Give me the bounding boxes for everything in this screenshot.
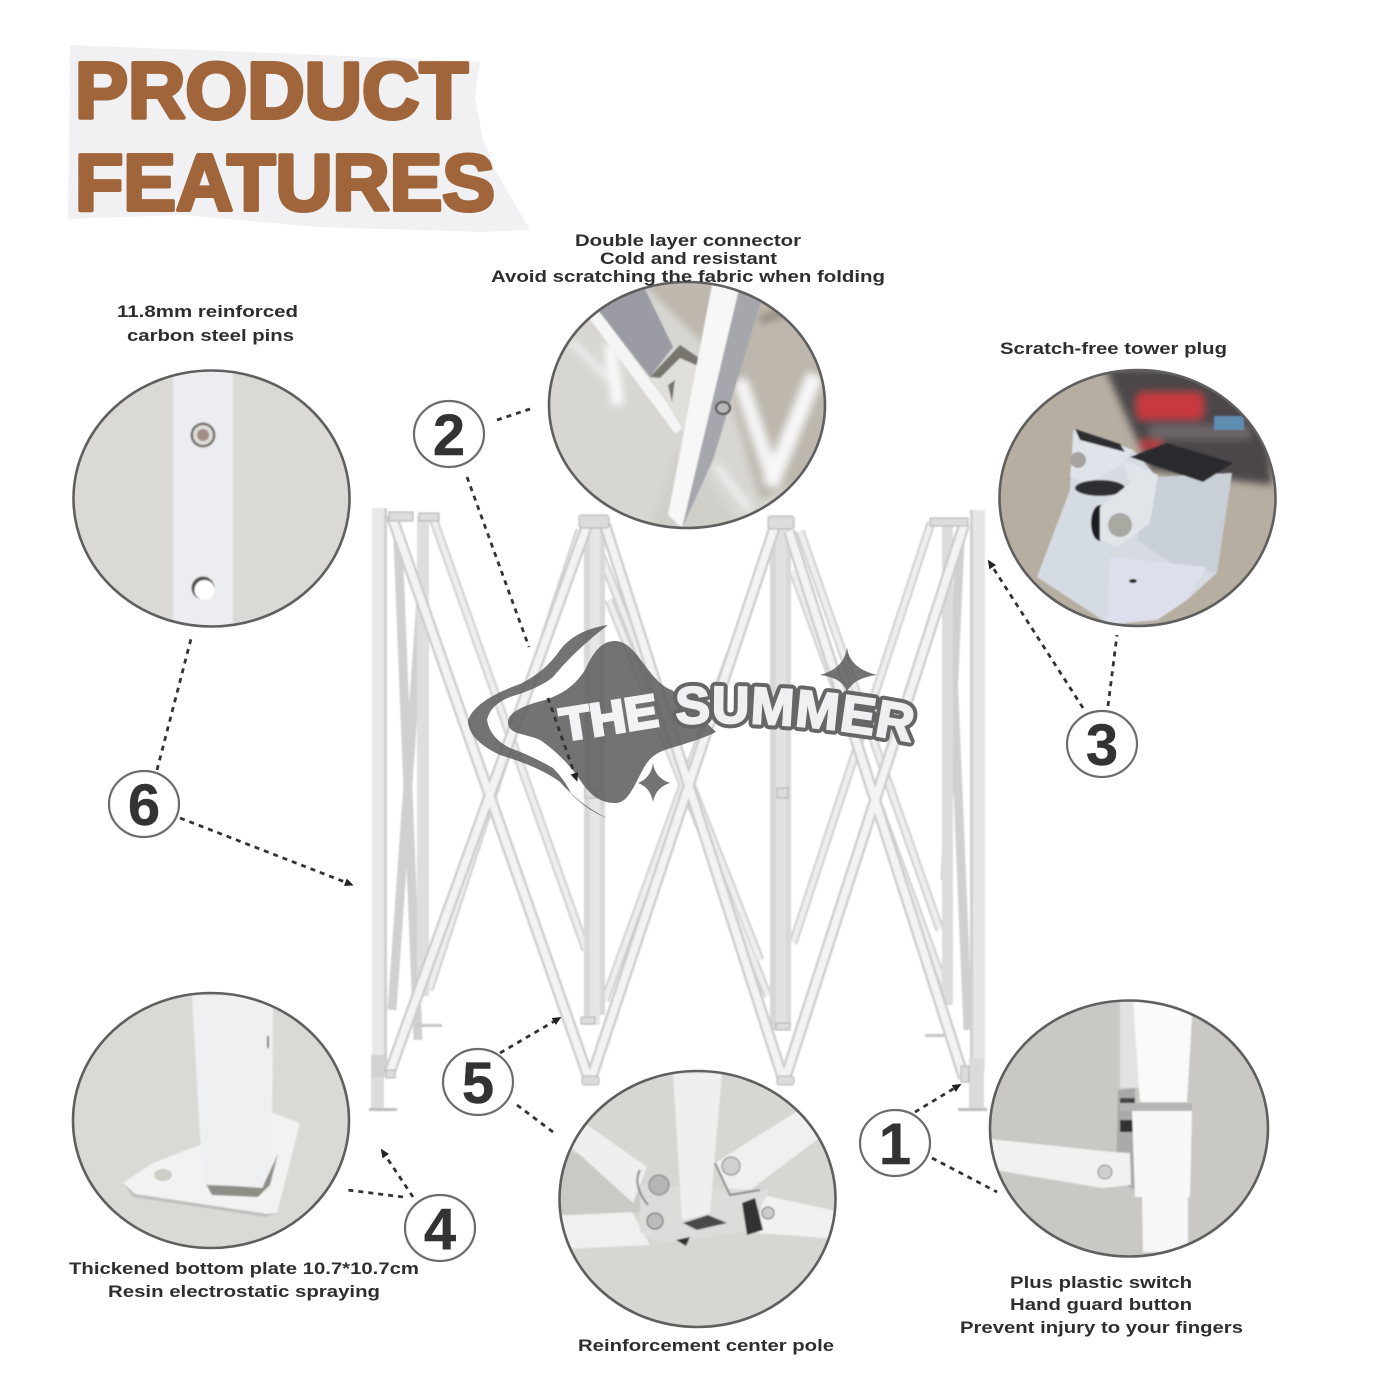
- label: bottom plate: Thickened bottom plate 10.7*10.7cm: [69, 1259, 419, 1278]
- number badge 4: 4: [424, 1197, 456, 1262]
- panel: 5 reinforcement center pole: [555, 1068, 840, 1330]
- panel: 3 scratch-free tower plug: [995, 365, 1280, 630]
- label: plastic switch: Prevent injury to your fingers: [960, 1318, 1243, 1337]
- title: FEATURES: [75, 138, 495, 227]
- title: [68, 45, 530, 232]
- label: bottom plate: [69, 1259, 419, 1301]
- label: bottom plate: Resin electrostatic spraying: [108, 1282, 380, 1301]
- number badge 6: [109, 771, 179, 838]
- number badge 6: 6: [128, 773, 160, 838]
- number badge 3: [1067, 711, 1137, 778]
- panel: 2 double layer connector: [545, 280, 830, 530]
- number badge 5: 5: [462, 1051, 494, 1116]
- label: carbon steel pins: 11.8mm reinforced: [117, 302, 298, 321]
- label: double layer connector: [491, 231, 885, 286]
- logo shapes: [468, 625, 877, 818]
- front scissor struts: [389, 514, 964, 1082]
- label: center pole: Reinforcement center pole: [578, 1336, 834, 1355]
- label: carbon steel pins: [117, 302, 298, 345]
- label: double layer connector: Double layer connector: [575, 231, 801, 250]
- panel: 4 thickened bottom plate: [70, 990, 355, 1252]
- label: tower plug: Scratch-free tower plug: [1000, 339, 1227, 358]
- callout arrows: [157, 409, 1117, 1197]
- panel: 1 plastic switch: [980, 996, 1272, 1261]
- label: plastic switch: Hand guard button: [1010, 1295, 1192, 1314]
- label: carbon steel pins: carbon steel pins: [127, 326, 294, 345]
- watermark logo: THE SUMMER: [468, 625, 918, 818]
- panel: 6 carbon steel pins: [70, 365, 355, 630]
- rear struts: [392, 518, 968, 1040]
- number badge 1: 1: [879, 1112, 911, 1177]
- logo wordmark: THE: [556, 684, 661, 751]
- number badge 3: 3: [1086, 713, 1118, 778]
- watermark logo: THE SUMMER: SUMMER: [676, 686, 914, 743]
- label: plastic switch: Plus plastic switch: [1010, 1273, 1192, 1292]
- title: PRODUCT: [75, 46, 468, 135]
- joints: [386, 512, 969, 1085]
- watermark logo: THE SUMMER: SUMMER: [672, 682, 918, 747]
- label: double layer connector: Avoid scratching the fabric when folding: [491, 267, 885, 286]
- number badge 1: [860, 1110, 930, 1177]
- number badge 5: [443, 1049, 513, 1116]
- number badge 2: [414, 401, 484, 468]
- vertical posts: [369, 508, 987, 1111]
- folding frame illustration: [369, 508, 987, 1111]
- number badge 4: [405, 1195, 475, 1262]
- label: plastic switch: [960, 1273, 1243, 1337]
- number badge 2: 2: [433, 403, 465, 468]
- label: double layer connector: Cold and resistant: [600, 249, 777, 268]
